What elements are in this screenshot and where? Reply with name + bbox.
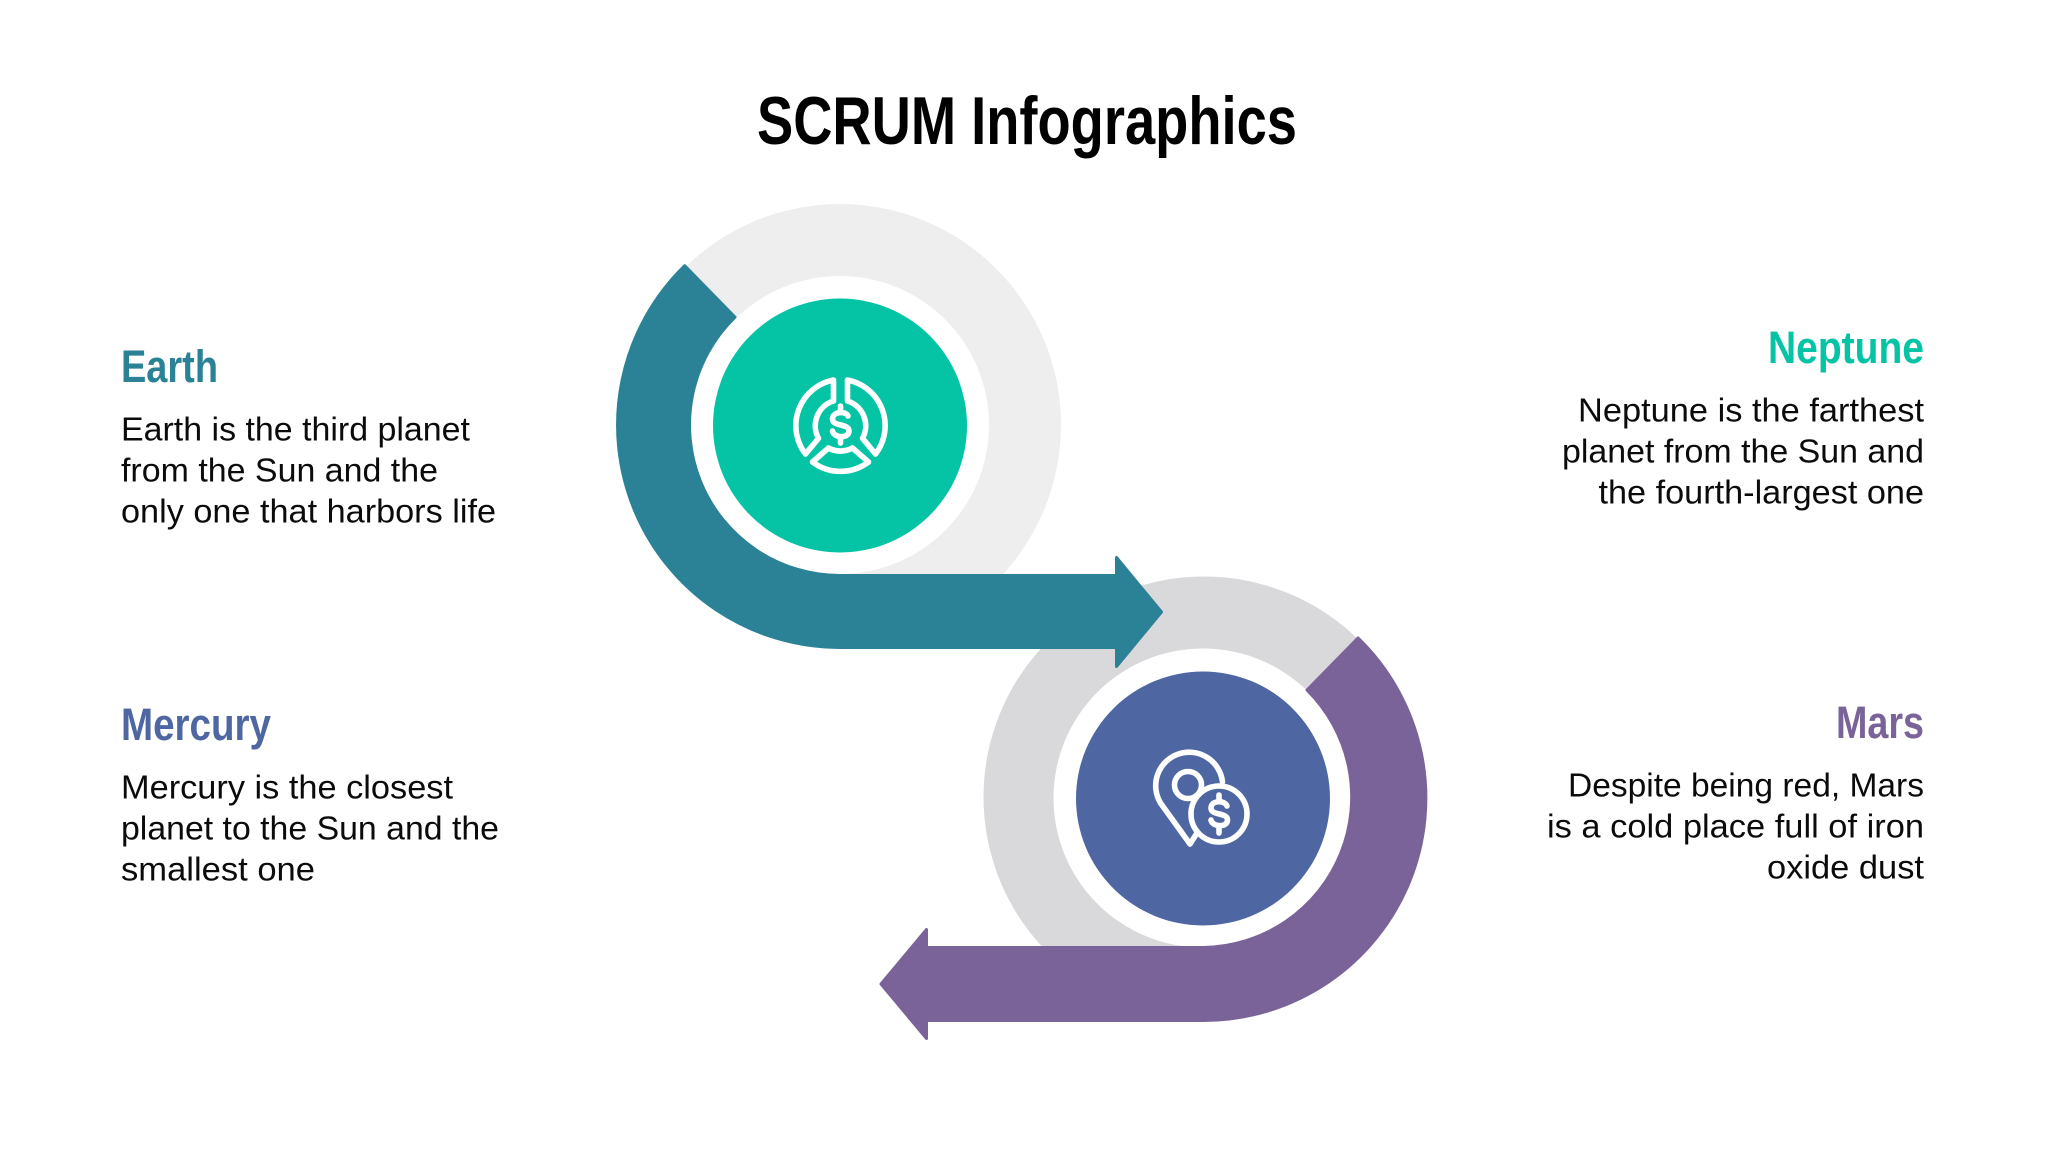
text: Neptune description <box>1562 392 1924 510</box>
heading: Mercury: Mercury <box>121 699 271 750</box>
blue circle <box>1076 672 1330 926</box>
heading: Mars: Mars <box>1836 697 1924 748</box>
panel: Mercury <box>121 699 499 888</box>
text: Neptune description: planet from the Sun and <box>1562 432 1924 470</box>
green circle <box>713 298 967 552</box>
text: Mercury description: planet to the Sun and the <box>121 810 499 846</box>
icon: dollar donut chart <box>796 380 885 471</box>
text: Earth description: only one that harbors life <box>121 492 496 530</box>
bottom blue circle with icon <box>1076 672 1330 926</box>
heading: Earth: Earth <box>121 341 218 392</box>
top green circle with icon <box>713 298 967 552</box>
text: Neptune description: Neptune is the farthest <box>1578 392 1924 428</box>
panel: Neptune <box>1562 322 1924 510</box>
title: SCRUM Infographics <box>757 83 1297 159</box>
arrow: purple curved arrow <box>881 638 1426 1038</box>
panel: Earth <box>121 341 496 530</box>
text: Earth description: from the Sun and the <box>121 452 438 488</box>
text: Mercury description <box>121 768 499 888</box>
text: Mercury description: Mercury is the closest <box>121 768 453 806</box>
top white ring <box>691 276 989 574</box>
heading: Neptune: Neptune <box>1768 322 1924 373</box>
text: Earth description <box>121 410 496 530</box>
panel: Mars <box>1547 697 1924 886</box>
icon: map pin with dollar coin <box>1156 752 1247 844</box>
bottom white ring <box>1054 648 1352 948</box>
text: Earth description: Earth is the third planet <box>121 410 470 448</box>
text: Mars description: is a cold place full of iron <box>1547 808 1924 844</box>
arrow: teal curved arrow <box>618 266 1162 666</box>
text: Mars description: Despite being red, Mars <box>1568 766 1924 804</box>
text: Mars description <box>1547 766 1924 886</box>
text: Mercury description: smallest one <box>121 850 315 888</box>
bottom gray ring <box>984 576 1424 1018</box>
text: Mars description: oxide dust <box>1767 848 1924 886</box>
text: Neptune description: the fourth-largest one <box>1598 474 1924 510</box>
top gray ring <box>619 204 1061 646</box>
